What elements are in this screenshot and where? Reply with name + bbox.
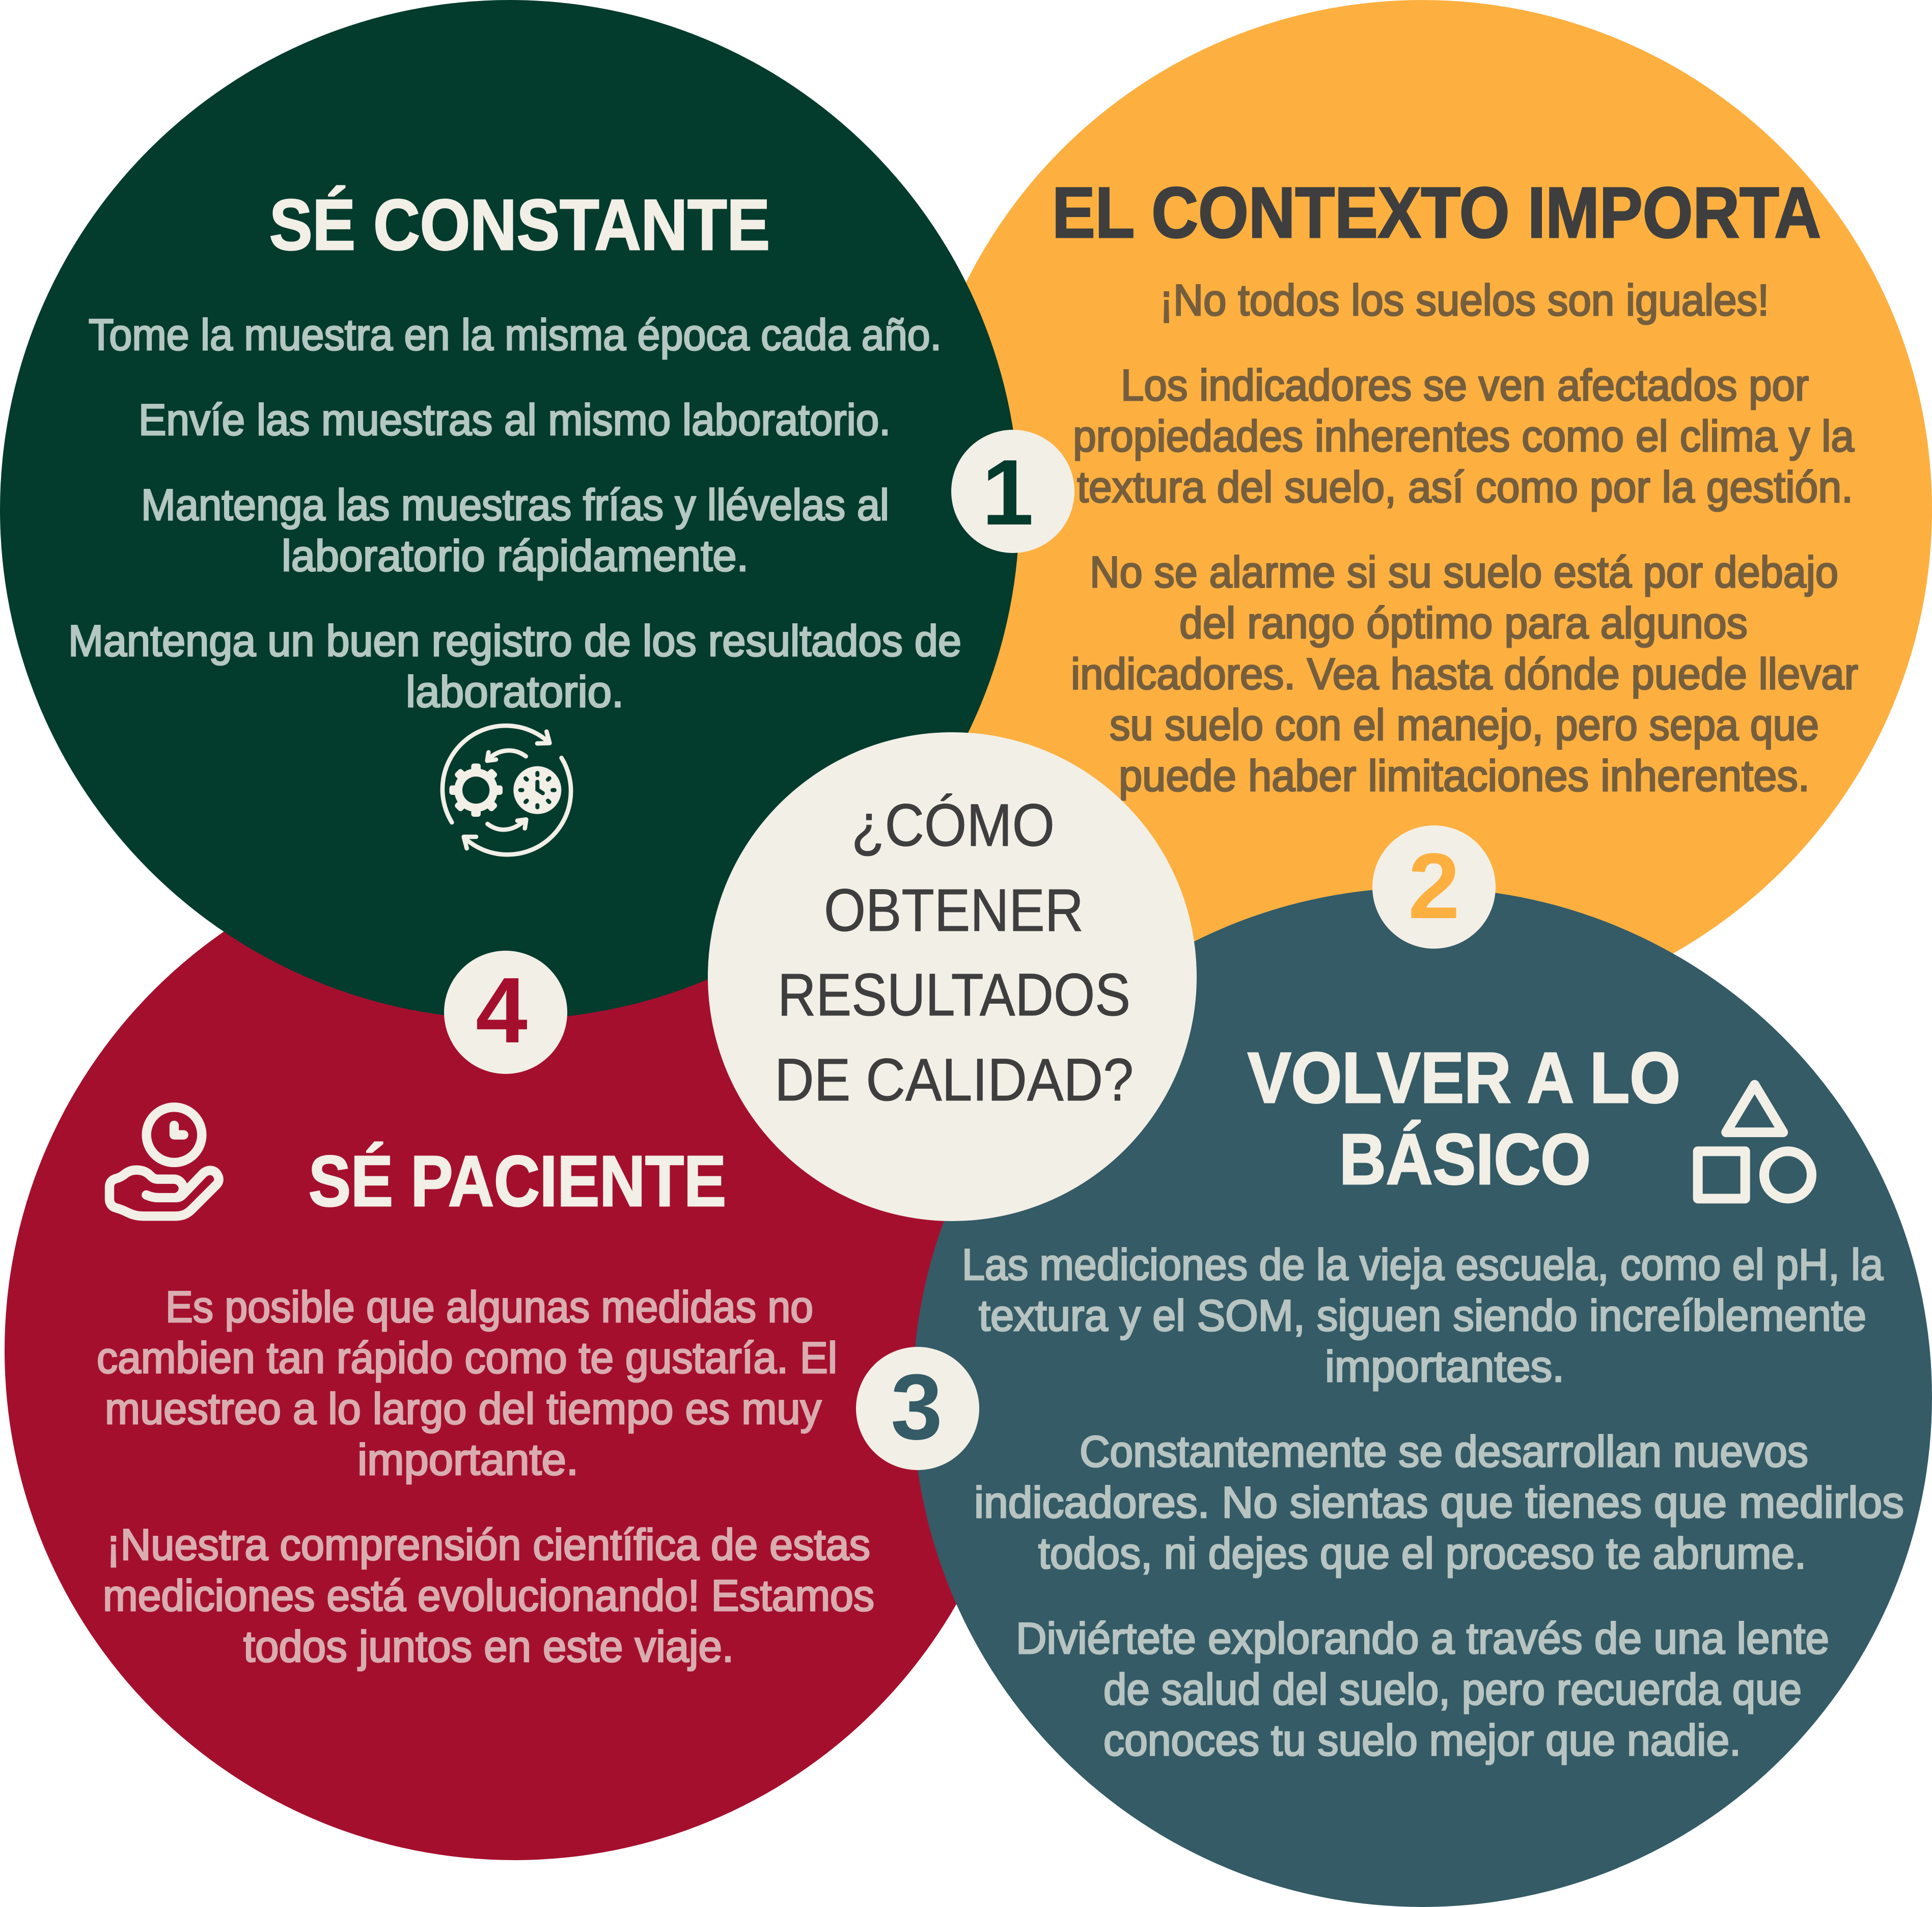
text block: patience body: importante. <box>357 1435 578 1484</box>
text block: context body: propiedades inherentes como el clima y la <box>1073 412 1854 461</box>
text block: consistency body: laboratorio rápidamente. <box>282 532 749 581</box>
heading: volver a lo básico: VOLVER A LO <box>1248 1037 1680 1118</box>
text block: basics body: importantes. <box>1325 1342 1564 1391</box>
text block: basics body: de salud del suelo, pero recuerda que <box>1103 1665 1802 1714</box>
text block: consistency body: laboratorio. <box>406 668 624 716</box>
badge: number 1: 1 <box>982 440 1034 544</box>
icon: gear and clock cycle <box>443 726 571 854</box>
text block: consistency body: Envíe las muestras al mismo laboratorio. <box>139 396 891 445</box>
badge: number 2 <box>1372 825 1496 949</box>
text block: patience body: todos juntos en este viaje. <box>243 1622 734 1671</box>
badge: number 2: 2 <box>1408 834 1460 938</box>
text block: patience body <box>97 1283 874 1671</box>
text block: basics body: Constantemente se desarrollan nuevos <box>1080 1427 1808 1476</box>
text block: context body: indicadores. Vea hasta dónde puede llevar <box>1071 650 1858 699</box>
center circle: question <box>708 732 1197 1221</box>
badge: number 4 <box>444 951 567 1074</box>
heading: volver a lo básico <box>1248 1037 1680 1199</box>
text block: context body: No se alarme si su suelo está por debajo <box>1090 548 1838 597</box>
text block: context body: ¡No todos los suelos son iguales! <box>1160 276 1769 325</box>
icon: basic shapes <box>1698 1085 1811 1199</box>
text block: context body: puede haber limitaciones inherentes. <box>1119 752 1810 800</box>
heading: volver a lo básico: BÁSICO <box>1339 1119 1591 1199</box>
text block: patience body: ¡Nuestra comprensión científica de estas <box>106 1521 870 1569</box>
badge: number 1 <box>951 430 1074 553</box>
text block: basics body: indicadores. No sientas que tienes que medirlos <box>974 1478 1904 1527</box>
center circle: question: RESULTADOS <box>778 961 1130 1029</box>
text block: patience body: muestreo a lo largo del tiempo es muy <box>105 1385 821 1433</box>
text block: patience body: mediciones está evolucionando! Estamos <box>103 1571 874 1620</box>
heading: el contexto importa: EL CONTEXTO IMPORTA <box>1052 172 1821 253</box>
center circle: question: OBTENER <box>824 877 1084 944</box>
panel: sé paciente <box>5 841 1024 1860</box>
text block: patience body: cambien tan rápido como te gustaría. El <box>97 1334 837 1383</box>
teal circle <box>913 888 1932 1907</box>
text block: basics body <box>962 1240 1904 1765</box>
badge: number 3 <box>856 1347 979 1470</box>
text block: context body: del rango óptimo para algunos <box>1179 599 1748 648</box>
panel: volver a lo básico <box>913 888 1932 1907</box>
text block: consistency body: Mantenga las muestras frías y llévelas al <box>141 481 889 530</box>
text block: basics body: conoces tu suelo mejor que nadie. <box>1103 1716 1741 1765</box>
orange circle <box>913 0 1932 1019</box>
center circle: question: ¿CÓMO <box>851 792 1055 859</box>
badge: number 3: 3 <box>891 1355 943 1459</box>
panel: el contexto importa <box>913 0 1932 1019</box>
heading: sé paciente: SÉ PACIENTE <box>309 1141 726 1221</box>
text block: context body <box>1071 276 1858 800</box>
text block: patience body: Es posible que algunas medidas no <box>165 1283 813 1332</box>
dark green circle <box>0 0 1019 1019</box>
panel: sé constante <box>0 0 1019 1019</box>
text block: context body: Los indicadores se ven afectados por <box>1121 361 1809 410</box>
text block: basics body: todos, ni dejes que el proceso te abrume. <box>1038 1529 1806 1578</box>
text block: basics body: Las mediciones de la vieja escuela, como el pH, la <box>962 1240 1883 1289</box>
text block: consistency body <box>68 311 961 716</box>
icon: hand holding clock <box>109 1107 219 1216</box>
text block: basics body: Diviértete explorando a través de una lente <box>1016 1614 1829 1663</box>
badge: number 4: 4 <box>476 958 528 1062</box>
text block: context body: textura del suelo, así como por la gestión. <box>1077 463 1853 512</box>
heading: sé constante: SÉ CONSTANTE <box>269 184 770 265</box>
text block: basics body: textura y el SOM, siguen siendo increíblemente <box>979 1291 1866 1340</box>
text block: context body: su suelo con el manejo, pero sepa que <box>1110 701 1819 750</box>
center circle: question: DE CALIDAD? <box>775 1046 1134 1114</box>
red circle <box>5 841 1024 1860</box>
text block: consistency body: Tome la muestra en la misma época cada año. <box>89 311 942 360</box>
text block: consistency body: Mantenga un buen registro de los resultados de <box>68 617 961 666</box>
